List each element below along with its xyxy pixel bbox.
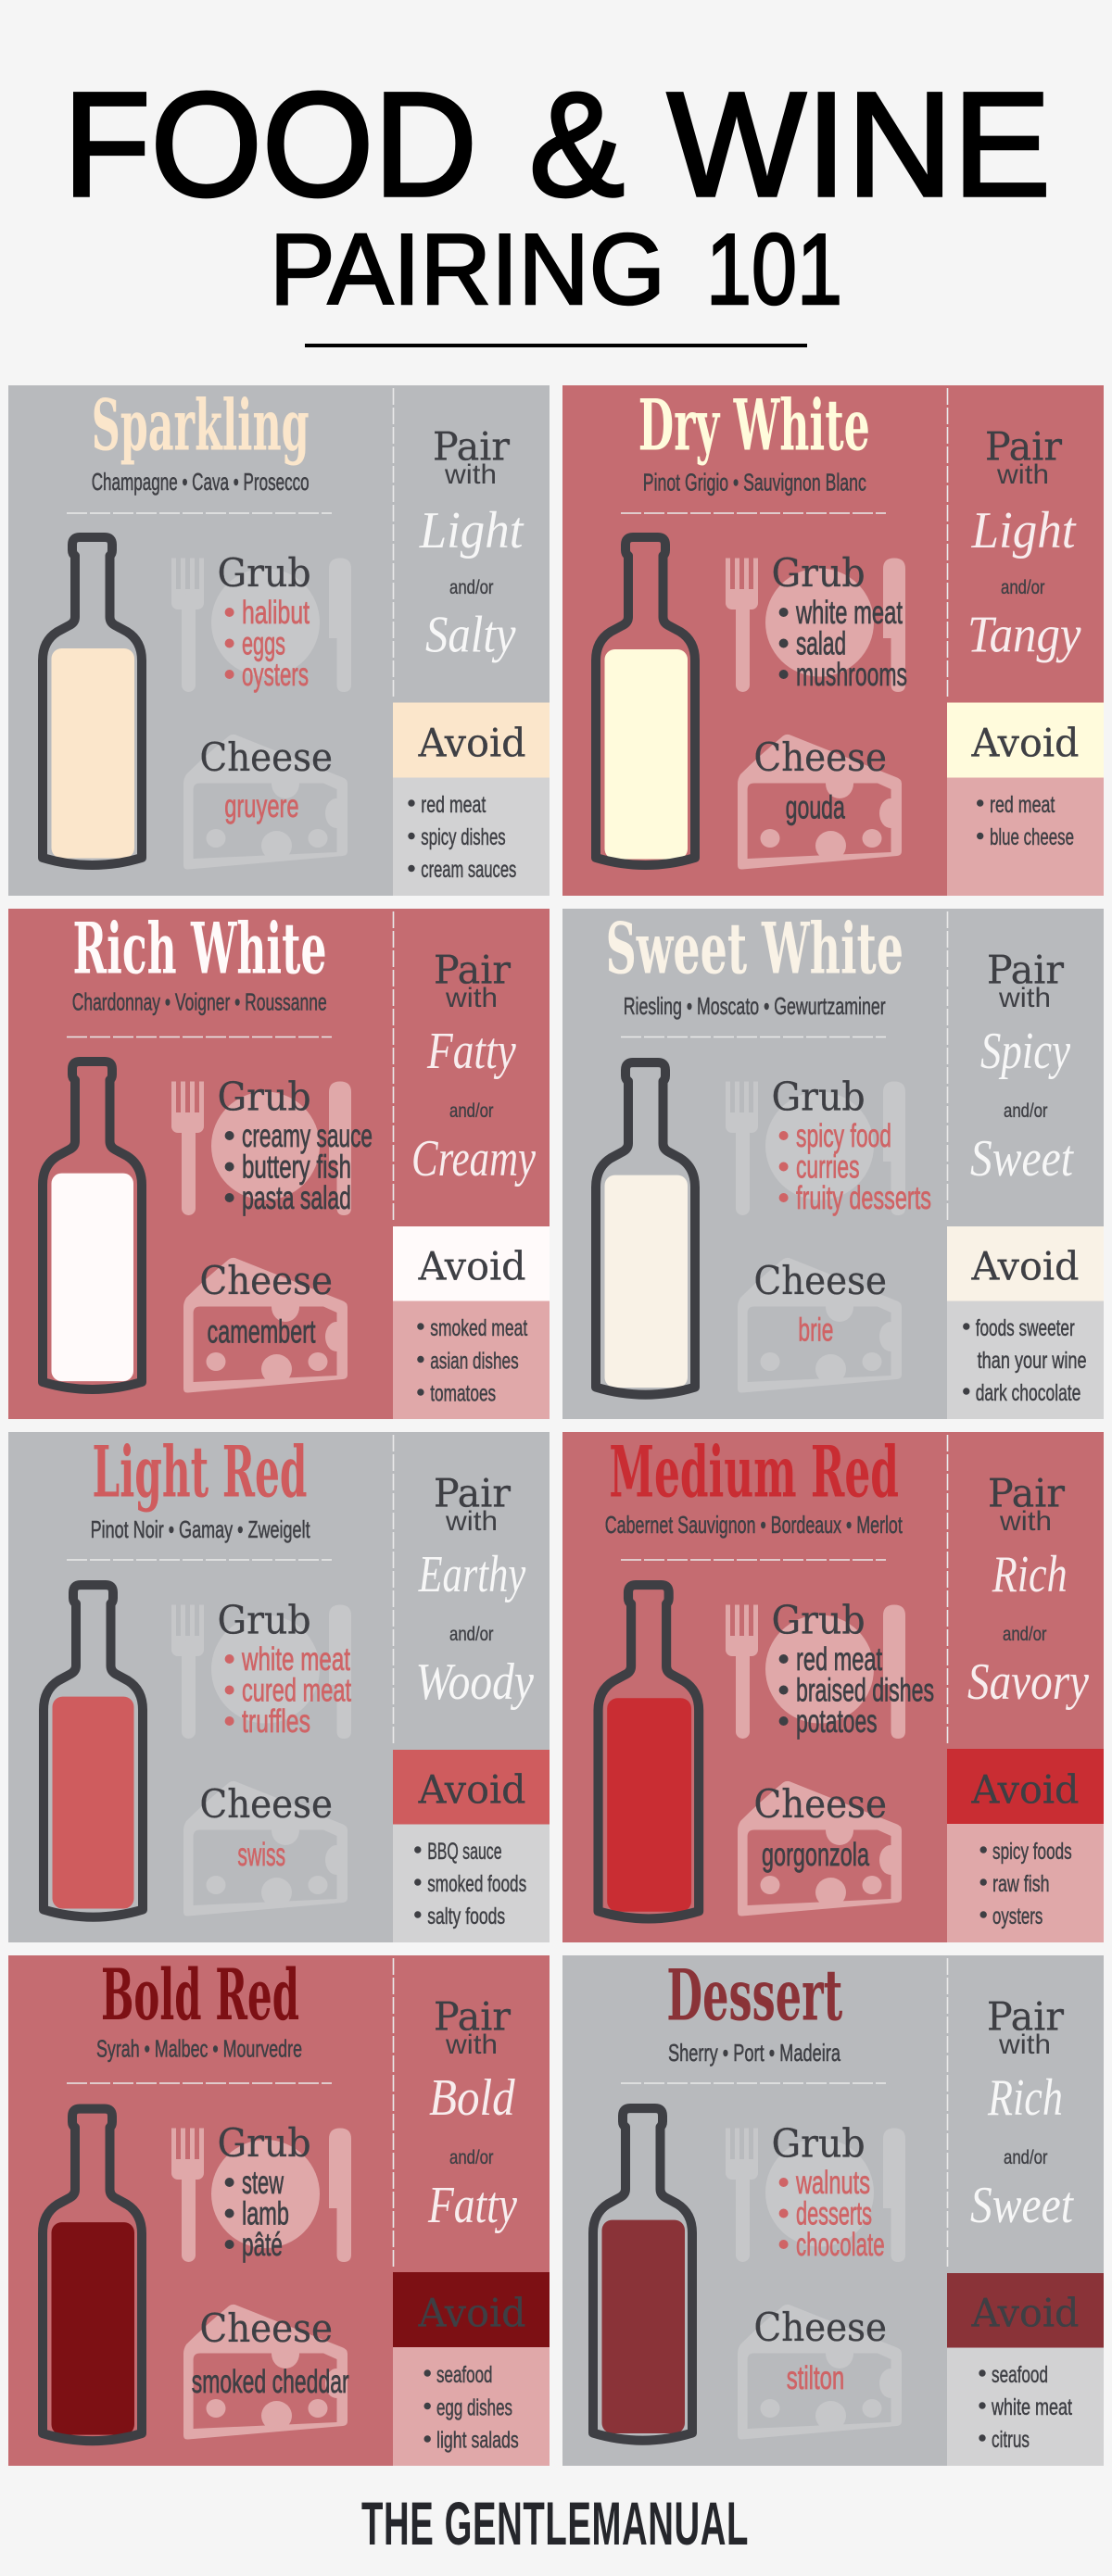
avoid list: seafood [992, 2362, 1048, 2388]
flavour: Bold: Bold [429, 2069, 515, 2127]
avoid list: spicy foods [992, 1839, 1072, 1865]
heading: Grub: Grub [772, 2121, 866, 2166]
avoid list: spicy dishes [421, 824, 506, 850]
grub list [225, 1118, 373, 1216]
cheese pairing: swiss [237, 1837, 285, 1873]
heading: Pair with: with [445, 2029, 498, 2060]
icon: fork, plate, knife [726, 558, 905, 692]
wine bottle [593, 2108, 692, 2441]
panel: Dessert [562, 1954, 1104, 2466]
avoid banner: Avoid [971, 2290, 1079, 2336]
avoid list: smoked foods [427, 1871, 526, 1897]
avoid list: salty foods [427, 1904, 505, 1929]
grub list: pâté [242, 2227, 283, 2263]
heading: Cheese: Cheese [754, 1781, 887, 1827]
heading: Pair with [434, 1471, 512, 1537]
and/or: and/or [1004, 2147, 1048, 2168]
wine bottle [43, 537, 142, 865]
icon: cheese [183, 1781, 348, 1916]
subtitle: Pairing 101: 101 [706, 213, 842, 326]
panel: Sparkling [8, 383, 550, 896]
grub list [779, 595, 907, 693]
avoid banner [393, 702, 550, 778]
grub list: halibut [242, 595, 310, 631]
title: Food & Wine: & [529, 61, 625, 227]
heading: Cheese: Cheese [754, 735, 887, 780]
icon: cheese [738, 1258, 902, 1393]
heading: Pair with: Pair [987, 947, 1065, 993]
heading: Pair with: Pair [985, 424, 1063, 469]
cheese pairing: brie [798, 1313, 833, 1349]
wine name: Dry White [638, 383, 870, 467]
heading: Grub: Grub [772, 1597, 866, 1643]
icon: fork, plate, knife [726, 2129, 905, 2262]
grub list: chocolate [796, 2227, 885, 2263]
heading: Grub: Grub [772, 550, 866, 596]
avoid banner: Avoid [971, 1767, 1079, 1812]
avoid list: smoked meat [430, 1315, 527, 1341]
avoid list [414, 1839, 526, 1929]
avoid list [963, 1315, 1087, 1406]
icon: cheese [738, 735, 902, 870]
avoid list: cream sauces [421, 857, 516, 883]
and/or: and/or [1003, 1624, 1047, 1645]
avoid banner [393, 1226, 550, 1301]
grape varieties: Riesling • Moscato • Gewurtzaminer [624, 992, 886, 1020]
heading: Grub: Grub [218, 1074, 311, 1119]
heading: Pair with: Pair [434, 947, 512, 993]
grub list: oysters [242, 657, 309, 693]
and/or: and/or [449, 1624, 494, 1645]
avoid list: light salads [436, 2427, 519, 2453]
avoid list: oysters [992, 1904, 1042, 1929]
heading: Pair with: with [445, 1506, 498, 1537]
grub list: braised dishes [796, 1673, 934, 1708]
heading: Pair with [434, 1993, 512, 2060]
icon: fork, plate, knife [171, 558, 351, 692]
grape varieties: Sherry • Port • Madeira [668, 2039, 840, 2067]
icon: cheese [183, 735, 348, 870]
avoid list [424, 2362, 519, 2453]
avoid banner [947, 2273, 1104, 2347]
avoid banner [393, 1750, 550, 1825]
avoid list: seafood [436, 2362, 493, 2388]
avoid list [980, 1839, 1072, 1929]
and/or: and/or [1004, 1100, 1048, 1122]
wine name: Sweet White [606, 908, 904, 989]
heading: Pair with [433, 424, 511, 490]
and/or: and/or [449, 1100, 494, 1122]
grub list: curries [796, 1149, 860, 1186]
heading: Cheese: Cheese [200, 735, 333, 780]
heading: Pair with [987, 947, 1065, 1013]
heading: Pair with: with [445, 983, 498, 1013]
subtitle: Pairing 101: PAIRING [270, 213, 665, 326]
flavour: Woody: Woody [415, 1653, 534, 1711]
avoid banner: Avoid [971, 721, 1079, 765]
icon: cheese [738, 1781, 902, 1916]
wine bottle [599, 1585, 699, 1918]
avoid list: BBQ sauce [427, 1839, 502, 1865]
grape varieties: Pinot Noir • Gamay • Zweigelt [91, 1515, 310, 1543]
heading: Cheese: Cheese [200, 1258, 333, 1303]
avoid banner [393, 2272, 550, 2347]
avoid list: red meat [421, 792, 486, 818]
flavour: Sweet: Sweet [970, 1130, 1074, 1187]
wine bottle [596, 537, 695, 865]
avoid banner: Avoid [418, 2290, 526, 2336]
avoid list [979, 2362, 1072, 2453]
grub list: white meat [241, 1641, 350, 1678]
heading: Pair with: Pair [434, 1471, 512, 1515]
grub list [225, 2165, 289, 2263]
grub list [225, 595, 310, 693]
icon: fork, plate, knife [171, 1082, 351, 1215]
grub list: red meat [796, 1641, 882, 1678]
grub list [779, 1641, 934, 1740]
grub list [779, 2165, 885, 2263]
heading: Grub: Grub [218, 2120, 311, 2166]
panel: Dry White [562, 383, 1104, 896]
grub list: potatoes [796, 1703, 878, 1740]
wine name: Light Red [93, 1430, 308, 1514]
panel: Rich White [8, 908, 550, 1419]
wine name: Dessert [666, 1954, 842, 2036]
cheese pairing: camembert [208, 1313, 316, 1351]
avoid list: asian dishes [430, 1349, 519, 1375]
wine bottle [43, 2109, 142, 2441]
avoid banner [947, 1226, 1104, 1301]
footer brand: THE GENTLEMANUAL [361, 2489, 749, 2557]
title: Food & Wine: WINE [667, 61, 1051, 227]
icon: cheese [738, 2305, 902, 2440]
avoid list: red meat [990, 792, 1055, 818]
avoid banner: Avoid [418, 1243, 526, 1289]
grub list: white meat [795, 595, 903, 631]
heading: Pair with: with [998, 983, 1051, 1013]
grub list: buttery fish [242, 1149, 351, 1186]
grub list: eggs [242, 626, 285, 661]
grub list: pasta salad [242, 1180, 351, 1216]
grub list: fruity desserts [796, 1180, 931, 1216]
wine name: Bold Red [101, 1954, 299, 2036]
flavour: Creamy: Creamy [411, 1130, 536, 1187]
avoid list: citrus [992, 2427, 1030, 2453]
heading: Pair with: Pair [434, 1993, 512, 2040]
heading: Pair with [985, 424, 1063, 490]
icon: fork, plate, knife [171, 1604, 351, 1739]
grape varieties: Chardonnay • Voigner • Roussanne [72, 988, 327, 1016]
avoid list [977, 792, 1074, 850]
icon: fork, plate, knife [726, 1082, 905, 1215]
heading: Pair with: with [999, 1506, 1052, 1537]
icon: cheese [183, 1258, 348, 1393]
and/or: and/or [1001, 577, 1045, 598]
flavour: Spicy: Spicy [980, 1023, 1070, 1080]
cheese pairing: stilton [787, 2360, 844, 2396]
grub list: stew [242, 2165, 284, 2201]
flavour: Earthy: Earthy [418, 1546, 525, 1603]
heading: Pair with: Pair [987, 1993, 1065, 2040]
heading: Pair with [987, 1993, 1065, 2060]
wine bottle [44, 1585, 143, 1917]
grub list: spicy food [796, 1118, 891, 1154]
heading: Pair with: Pair [988, 1471, 1066, 1515]
flavour: Light: Light [971, 502, 1077, 559]
grub list: cured meat [242, 1673, 351, 1708]
and/or: and/or [449, 577, 494, 598]
avoid banner: Avoid [418, 1767, 526, 1812]
icon: cheese [183, 2305, 348, 2440]
cheese pairing: gruyere [224, 788, 299, 824]
heading: Pair with: with [996, 459, 1049, 490]
cheese pairing: gouda [786, 789, 845, 826]
grub list: walnuts [795, 2165, 870, 2201]
flavour: Salty: Salty [425, 607, 516, 664]
avoid banner [947, 1749, 1104, 1824]
flavour: Sweet: Sweet [970, 2177, 1074, 2234]
grape varieties: Cabernet Sauvignon • Bordeaux • Merlot [605, 1511, 903, 1539]
panel: Bold Red [8, 1954, 550, 2466]
flavour: Rich: Rich [992, 1546, 1068, 1603]
title: Food & Wine [63, 61, 1051, 227]
icon: fork, plate, knife [171, 2129, 351, 2262]
heading: Grub: Grub [218, 550, 311, 596]
heading: Pair with: with [444, 459, 497, 490]
grub list [779, 1118, 931, 1216]
heading: Pair with [988, 1471, 1066, 1537]
grub list: lamb [242, 2195, 289, 2232]
heading: Cheese: Cheese [200, 1781, 333, 1827]
flavour: Fatty: Fatty [427, 2177, 517, 2234]
avoid banner [947, 702, 1104, 778]
avoid list [408, 792, 516, 883]
heading: Cheese: Cheese [754, 1258, 887, 1303]
icon: fork, plate, knife [726, 1604, 905, 1739]
avoid list: white meat [991, 2394, 1072, 2420]
heading: Grub: Grub [218, 1597, 311, 1643]
grape varieties: Syrah • Malbec • Mourvedre [96, 2034, 302, 2062]
grape varieties: Pinot Grigio • Sauvignon Blanc [643, 469, 866, 496]
heading: Pair with: with [998, 2029, 1051, 2060]
heading: Pair with [434, 947, 512, 1013]
flavour: Tangy: Tangy [967, 607, 1081, 664]
grub list: creamy sauce [242, 1118, 373, 1154]
heading: Cheese: Cheese [200, 2306, 333, 2351]
avoid list: raw fish [992, 1871, 1050, 1897]
wine name: Medium Red [609, 1430, 899, 1514]
panel: Sweet White [562, 908, 1104, 1419]
grape varieties: Champagne • Cava • Prosecco [92, 468, 310, 496]
avoid list: blue cheese [990, 824, 1074, 850]
avoid list [417, 1315, 527, 1406]
panel: Light Red [8, 1430, 550, 1942]
avoid banner: Avoid [418, 721, 526, 765]
avoid banner: Avoid [971, 1243, 1079, 1289]
cheese pairing: smoked cheddar [192, 2364, 349, 2400]
heading: Grub: Grub [772, 1074, 866, 1119]
wine name: Rich White [72, 908, 326, 989]
flavour: Light: Light [419, 502, 524, 559]
flavour: Rich: Rich [987, 2069, 1063, 2127]
grub list [225, 1641, 351, 1740]
cheese pairing: gorgonzola [762, 1837, 869, 1873]
grub list: salad [796, 626, 846, 661]
avoid list: egg dishes [436, 2395, 512, 2421]
grub list: desserts [796, 2195, 872, 2232]
flavour: Savory: Savory [967, 1653, 1089, 1711]
title underline [305, 344, 807, 347]
wine bottle [43, 1062, 142, 1389]
avoid list: tomatoes [430, 1380, 496, 1406]
grub list: truffles [242, 1703, 310, 1740]
and/or: and/or [449, 2147, 494, 2168]
flavour: Fatty: Fatty [426, 1023, 516, 1080]
title: Food & Wine: FOOD [63, 61, 477, 227]
wine bottle [596, 1062, 695, 1395]
heading: Cheese: Cheese [754, 2305, 887, 2350]
grub list: mushrooms [796, 657, 907, 693]
heading: Pair with: Pair [433, 424, 511, 469]
panel: Medium Red [562, 1430, 1104, 1942]
wine name: Sparkling [92, 383, 310, 467]
